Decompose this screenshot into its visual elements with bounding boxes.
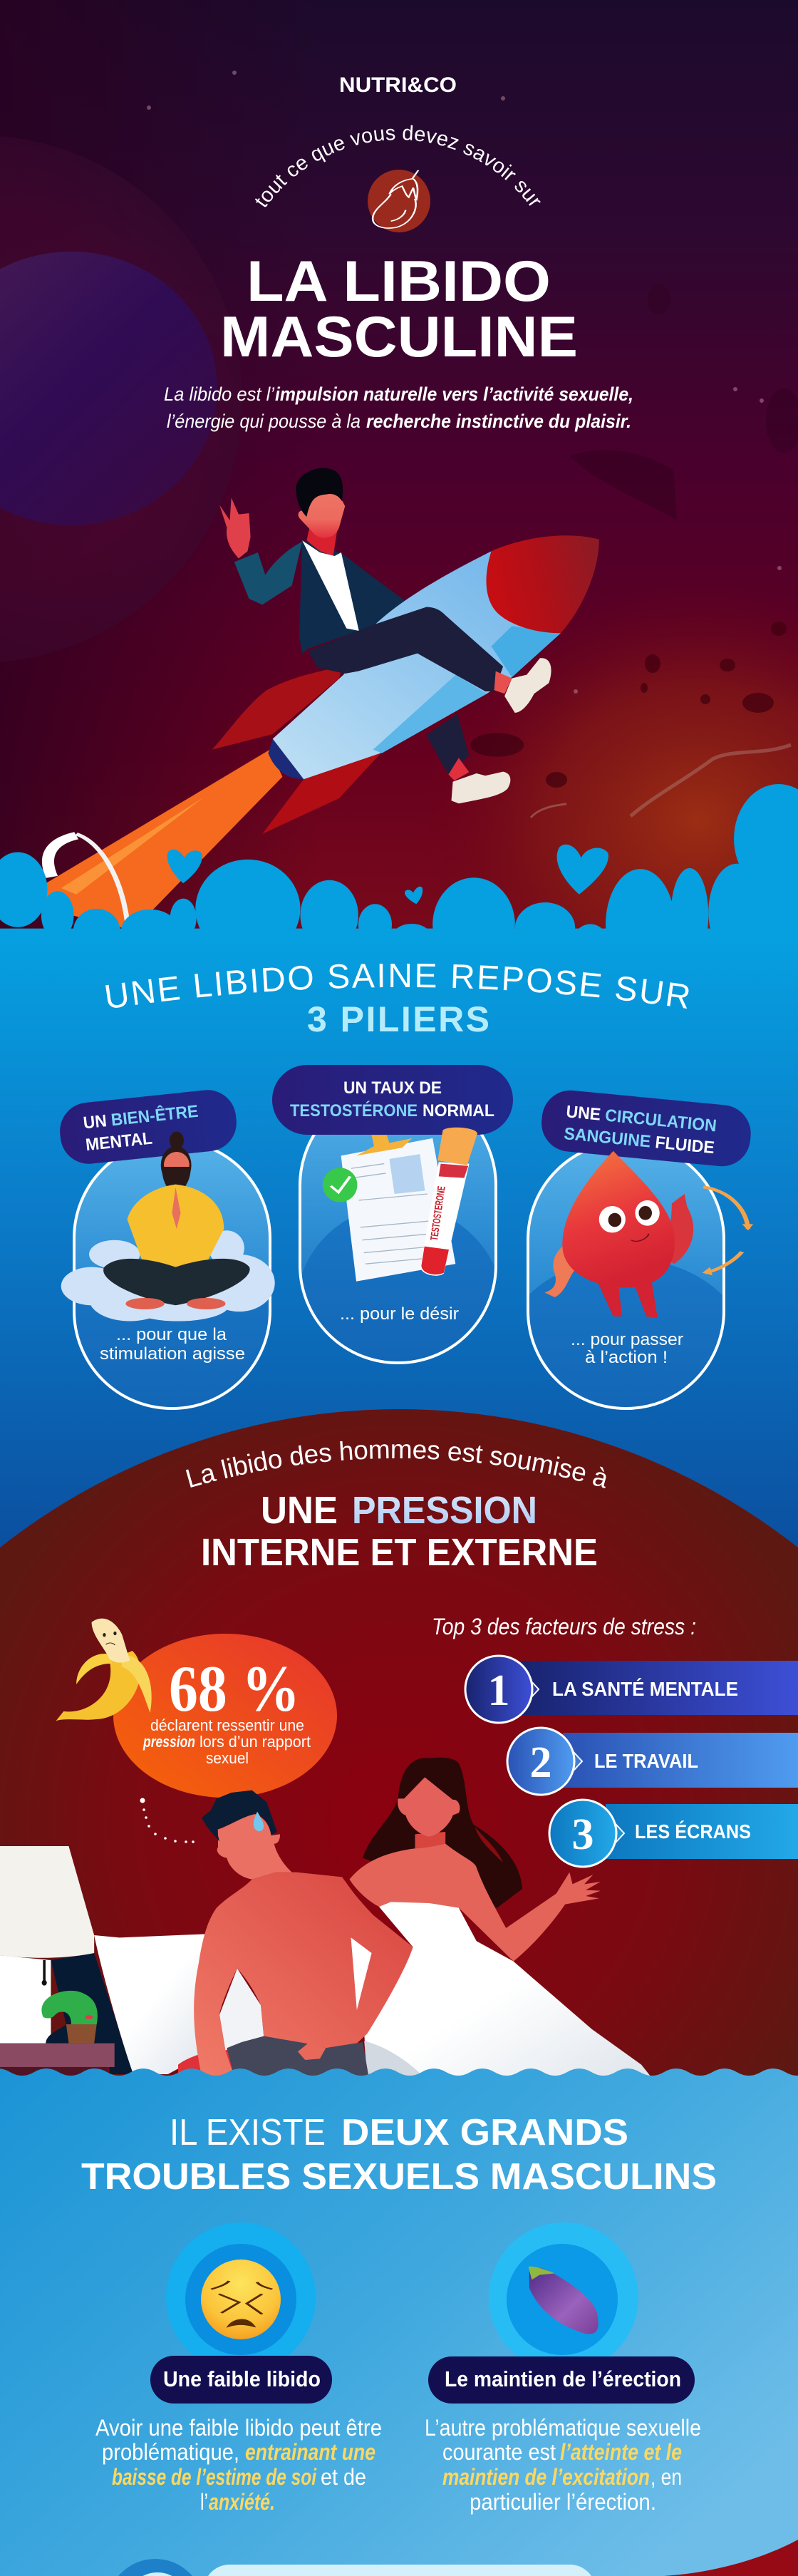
description: l’atteinte et le	[560, 2439, 682, 2465]
banner	[57, 1087, 239, 1167]
stress factor 2: 2	[530, 1738, 551, 1787]
logo: NUTRI&CO	[339, 73, 457, 97]
description: Avoir une faible libido peut être	[95, 2415, 382, 2441]
bed sheet	[364, 1902, 651, 2076]
description	[95, 2415, 382, 2515]
pillow	[94, 1934, 206, 2074]
next section preview: icon and card	[107, 2559, 596, 2576]
title: LA LIBIDO	[247, 249, 551, 314]
intro text	[164, 383, 633, 432]
label pill	[428, 2356, 695, 2404]
callout: 68 percent bubble: 68 %	[169, 1652, 300, 1725]
caption: ... pour le désir	[340, 1304, 459, 1324]
curved tagline: tout ce que vous devez savoir sur	[255, 125, 541, 207]
caption	[571, 1330, 683, 1367]
clipboard and test tube	[323, 1128, 477, 1282]
callout: 68 percent bubble: lors d’un rapport	[200, 1733, 311, 1751]
description: problématique,	[102, 2439, 239, 2465]
description: courante est	[442, 2439, 556, 2465]
soft shadow	[470, 733, 524, 757]
intro text: La libido est l’	[164, 383, 275, 405]
intro text: recherche instinctive du plaisir.	[366, 411, 631, 432]
caption: ... pour passer	[571, 1330, 683, 1349]
banner	[539, 1088, 753, 1169]
panel: pressure section background	[0, 1409, 798, 2576]
woman	[349, 1758, 601, 1962]
title: MASCULINE	[220, 305, 578, 369]
stress factor 3: 3	[571, 1810, 594, 1859]
pillar 2: testosterone	[272, 1065, 513, 1364]
stress factor 2	[507, 1728, 798, 1795]
illustration: man riding rocket	[46, 468, 599, 928]
description: l’	[200, 2489, 208, 2515]
dotted thought line	[140, 1798, 195, 1843]
illustration: bedroom scene	[0, 1758, 651, 2076]
panel: space background	[0, 0, 798, 1062]
description: particulier l’érection.	[470, 2489, 656, 2515]
stress factor 2: LE TRAVAIL	[594, 1750, 698, 1772]
banner: NORMAL	[423, 1101, 494, 1120]
description: baisse de l’estime de soi	[112, 2464, 317, 2490]
label pill: Le maintien de l’érection	[445, 2366, 681, 2391]
panel: two disorders background	[0, 2068, 798, 2576]
description: entrainant une	[245, 2439, 375, 2465]
description	[425, 2415, 701, 2515]
description: , en	[651, 2464, 682, 2490]
intro text: l’énergie qui pousse à la	[167, 411, 361, 432]
callout: 68 percent bubble: déclarent ressentir une	[150, 1716, 304, 1734]
stress factor 3	[549, 1800, 798, 1867]
panel: three pillars background	[0, 941, 798, 1550]
heading: pressure	[185, 1441, 606, 1574]
label pill	[150, 2356, 332, 2404]
icon: banana	[56, 1619, 152, 1721]
description: maintien de l’excitation	[442, 2464, 650, 2490]
meditating man	[61, 1131, 275, 1322]
lamp and bedside	[0, 1846, 133, 2076]
heading: three pillars: 3 PILIERS	[307, 999, 489, 1039]
stress factor 1: 1	[487, 1666, 510, 1715]
stress factor 1: LA SANTÉ MENTALE	[552, 1678, 738, 1700]
corner red shape	[664, 2540, 798, 2576]
description: L’autre problématique sexuelle	[425, 2415, 701, 2441]
banner: MENTAL	[85, 1129, 153, 1155]
stress factor 3: LES ÉCRANS	[635, 1820, 751, 1843]
jacket behind rocket	[299, 540, 405, 654]
heading: pressure: PRESSION	[352, 1489, 537, 1532]
icon: eggplant in circle	[368, 170, 430, 232]
heading: two disorders	[81, 2112, 717, 2198]
title	[220, 249, 578, 369]
banner: UNE CIRCULATION	[565, 1102, 717, 1135]
man	[178, 1791, 413, 2076]
callout: 68 percent bubble: pression	[142, 1733, 195, 1751]
intro text: impulsion naturelle vers l’activité sexuelle,	[275, 383, 633, 405]
pillar 3: blood flow	[527, 1091, 754, 1410]
banner: SANGUINE FLUIDE	[563, 1124, 715, 1158]
ring	[48, 834, 128, 922]
heading: three pillars	[105, 964, 688, 1039]
heading: two disorders: IL EXISTE	[170, 2112, 326, 2153]
flame	[46, 750, 282, 928]
caption: ... pour que la	[116, 1325, 227, 1344]
fins	[212, 666, 382, 834]
heading: two disorders: TROUBLES SEXUELS MASCULINS	[81, 2156, 717, 2198]
callout: 68 percent bubble: sexuel	[206, 1749, 249, 1767]
description: anxiété.	[209, 2489, 275, 2515]
label pill: Une faible libido	[163, 2366, 321, 2391]
man	[219, 468, 551, 713]
description: et de	[321, 2464, 366, 2490]
rear leg	[426, 714, 510, 803]
caption	[100, 1325, 245, 1364]
rocket body	[268, 535, 599, 779]
pillar 1: well-being	[60, 1090, 275, 1410]
heading: pressure: INTERNE ET EXTERNE	[201, 1531, 598, 1574]
caption: stimulation agisse	[100, 1344, 245, 1364]
icon: eggplant	[489, 2222, 638, 2372]
caption: à l’action !	[585, 1348, 668, 1367]
heading: pressure: La libido des hommes est soumise à	[185, 1441, 606, 1488]
blood drop character	[544, 1151, 753, 1318]
banner: TESTOSTÉRONE	[290, 1101, 418, 1120]
banner: UN TAUX DE	[343, 1078, 442, 1098]
icon: distressed emoji	[166, 2222, 316, 2372]
heading: three pillars: UNE LIBIDO SAINE REPOSE SUR	[105, 964, 688, 1009]
heading: two disorders: DEUX GRANDS	[341, 2112, 628, 2153]
disorder 2: erection	[425, 2222, 701, 2515]
stress factors heading: Top 3 des facteurs de stress :	[432, 1614, 696, 1639]
stress factor 1	[465, 1656, 798, 1723]
banner: UN BIEN-ÊTRE	[82, 1101, 200, 1133]
heading: pressure: UNE	[261, 1489, 338, 1532]
clouds and hearts	[0, 784, 798, 980]
test tube label: TESTOSTERONE	[428, 1185, 448, 1242]
disorder 1: low libido	[95, 2222, 382, 2515]
callout: 68 percent bubble	[113, 1634, 337, 1798]
banner	[272, 1065, 513, 1135]
